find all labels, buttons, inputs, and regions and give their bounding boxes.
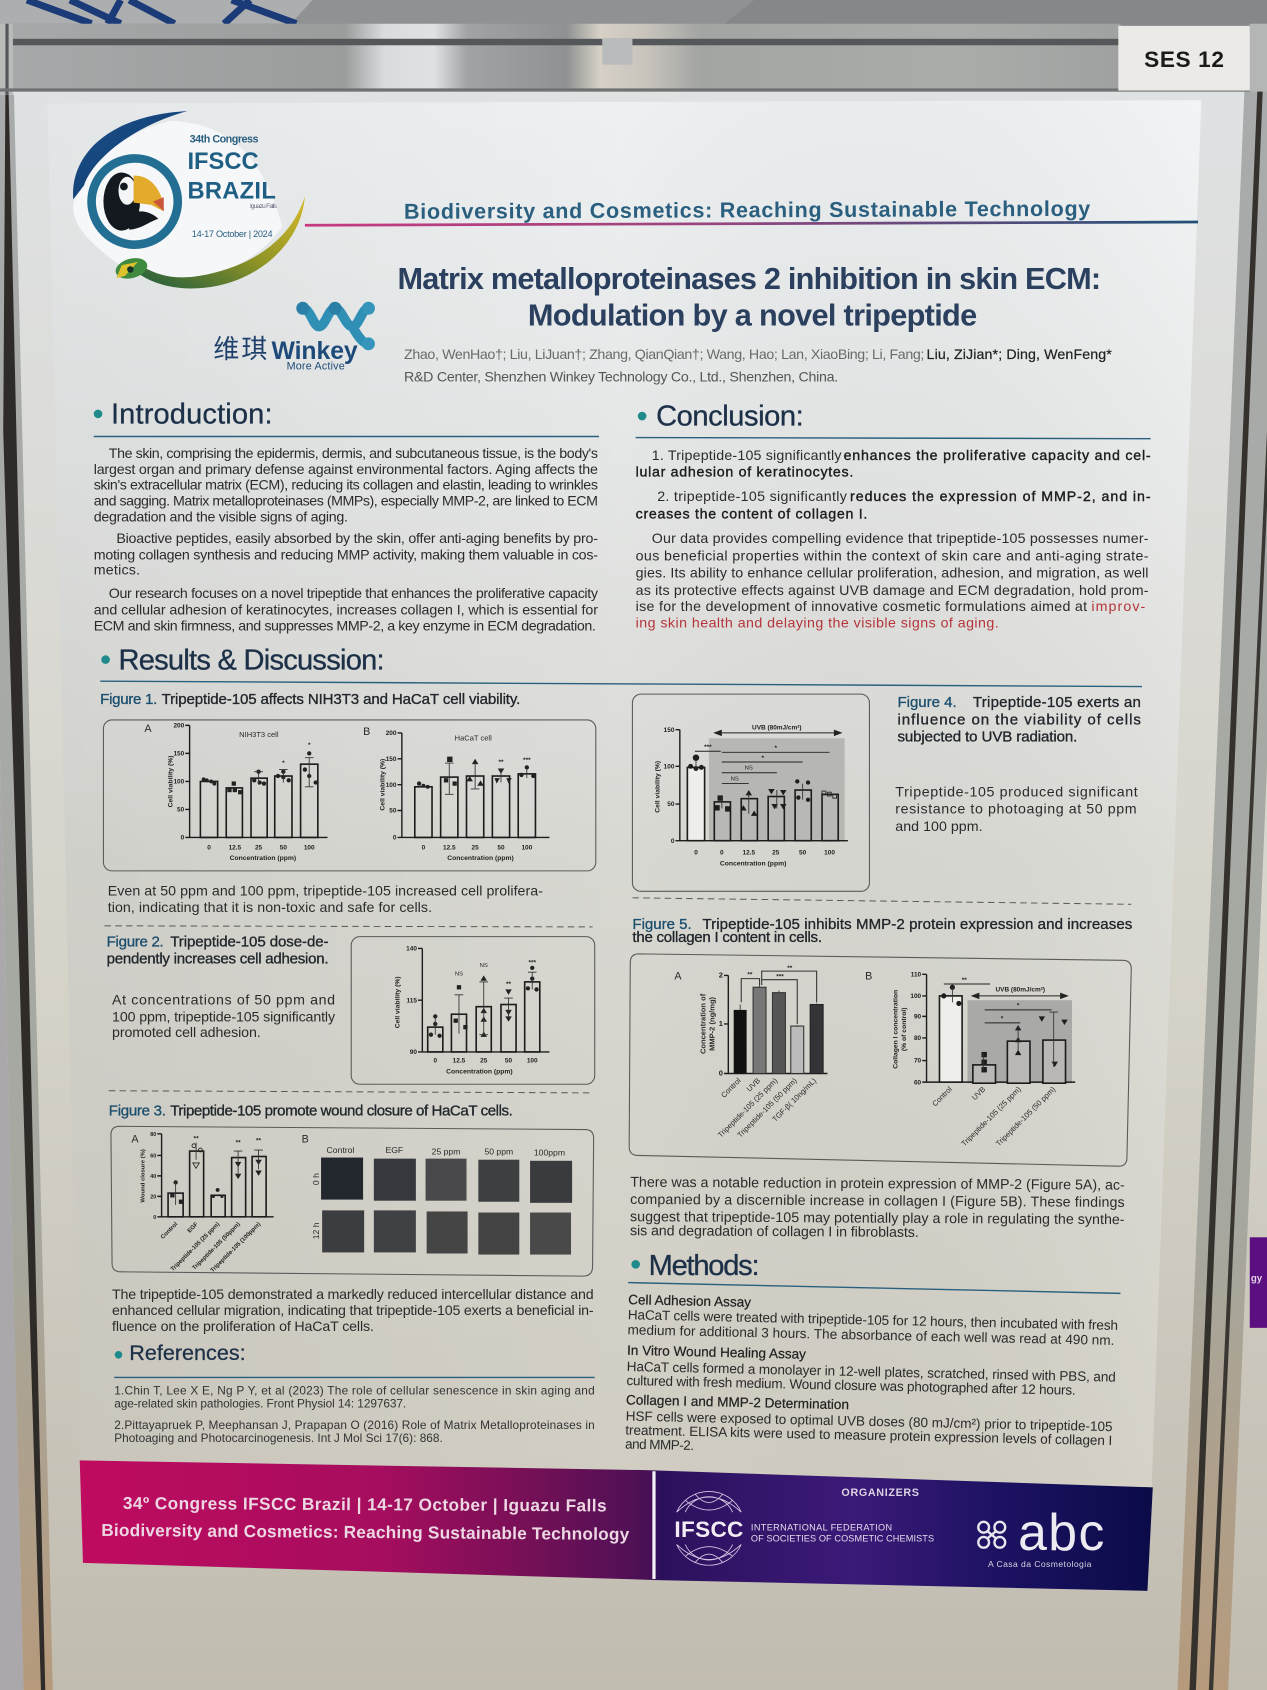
chart: cell adhesion: 100 [527,1058,538,1065]
chart: 1A NIH3T3 cell viability: 150 [173,751,185,758]
figure 5 caption: companied by a discernible increase in collagen I (Figure 5B). These findings [630,1192,1125,1211]
chart: 1A NIH3T3 cell viability: Cell viability (%) [167,755,174,807]
panel: figure 2: 100 ppm, tripeptide-105 significantly [112,1010,336,1026]
methods text: Cell Adhesion Assay [628,1292,751,1310]
figure 1 caption [108,884,543,916]
chart: UVB viability: Concentration (ppm) [720,860,786,867]
chart: cell adhesion: ** [506,981,512,988]
chart: wound closure: ** [236,1140,241,1147]
header: conference logo: 34th Congress [190,133,259,145]
logo: IFSCC: OF SOCIETIES OF COSMETIC CHEMISTS [751,1533,934,1543]
chart: 1A NIH3T3 cell viability: A [144,723,152,735]
chart: cell adhesion: *** [528,960,536,967]
introduction text [94,446,599,635]
chart: 1B HaCaT cell viability: 100 [521,844,533,851]
authors and affiliation: R&D Center, Shenzhen Winkey Technology Co., Ltd., Shenzhen, China. [404,370,838,386]
chart: wound closure: Wound closure (%) [140,1149,146,1203]
chart: UVB viability: 0 [720,850,724,857]
chart: wound closure: A [131,1133,139,1145]
chart: 1B HaCaT cell viability: ** [498,759,504,766]
chart: wound closure: EGF [187,1221,200,1234]
chart: 1A NIH3T3 cell viability: * [308,742,311,749]
chart: MMP-2 concentration: Control [719,1076,743,1100]
chart: 1A NIH3T3 cell viability: 25 [255,844,263,851]
right post [1178,92,1267,1690]
chart: 1B HaCaT cell viability: Concentration (ppm) [447,855,514,862]
chart: UVB viability: UVB (80mJ/cm²) [752,725,802,732]
chart: wound closure: 20 [150,1195,156,1201]
chart: wound closure: Tripeptide-105 (100ppm) [210,1222,262,1274]
chart: 1A NIH3T3 cell viability: NIH3T3 cell [239,730,279,739]
chart: wound closure: 60 [150,1154,156,1160]
chart: wound closure: ** [256,1137,262,1144]
panel: figure 5 [629,916,1132,1242]
chart: UVB viability: 50 [799,850,807,857]
chart: collagen I concentration [865,971,1075,1148]
chart: UVB viability: Cell viability (%) [654,761,661,813]
chart: UVB viability: 12.5 [742,850,755,857]
methods text: HaCaT cells formed a monolayer in 12-well plates, scratched, rinsed with PBS, and [627,1359,1116,1385]
chart: 1B HaCaT cell viability: 50 [389,808,397,815]
panel: figure 2: Figure 2. [107,933,164,950]
conclusion text: Our data provides compelling evidence that tripeptide-105 possesses numer- [652,531,1149,547]
conclusion text: 1. Tripeptide-105 significantly [652,448,842,464]
logo: IFSCC: INTERNATIONAL FEDERATION [751,1522,892,1532]
chart: collagen I concentration: Tripeptide-105 (50 ppm) [994,1084,1058,1148]
chart: 1A NIH3T3 cell viability: 0 [207,844,211,851]
introduction text: and sagging. Matrix metalloproteinases (MMPs), especially MMP-2, are linked to ECM [94,493,598,509]
conclusion text: gies. Its ability to enhance cellular proliferation, adhesion, and migration, as well [636,566,1148,582]
chart: 1A NIH3T3 cell viability: 200 [173,723,185,730]
chart: MMP-2 concentration: TGF-β( 10ng/mL) [770,1076,818,1124]
header: conference logo [73,111,305,288]
panel: conclusion: Conclusion: [656,401,804,433]
chart: cell adhesion: 50 [505,1058,513,1065]
micrographs: B [302,1133,309,1145]
title: Modulation by a novel tripeptide [528,297,977,332]
title [398,261,1101,332]
chart: 1A NIH3T3 cell viability [144,723,328,862]
chart: 1A NIH3T3 cell viability: 50 [177,807,185,814]
chart: cell adhesion: Cell viability (%) [395,976,402,1028]
methods text: HaCaT cells were treated with tripeptide-105 for 12 hours, then incubated with fresh [628,1307,1118,1333]
micrographs: 12 h [311,1222,321,1239]
heading: results and discussion: Results & Discussion: [119,644,385,676]
figure 4 title [897,694,1141,746]
chart: 1A NIH3T3 cell viability: * [282,760,285,767]
neighbouring poster strip [1250,1237,1267,1328]
panel: figure 3: Tripeptide-105 promote wound closure of HaCaT cells. [170,1103,513,1120]
introduction text: Our research focuses on a novel tripeptide that enhances the proliferative capacity [109,586,599,602]
panel: figure 1: Tripeptide-105 affects NIH3T3 and HaCaT cell viability. [162,691,520,708]
chart: wound closure: 0 [153,1215,156,1221]
logo: Winkey: 维琪 [213,335,267,364]
panel: figure 5: Figure 5. [632,916,692,933]
micrographs: 50 ppm [484,1146,513,1156]
chart: UVB viability: * [762,755,765,762]
chart: 1B HaCaT cell viability: 200 [386,730,397,737]
methods text: HSF cells were exposed to optimal UVB doses (80 mJ/cm²) prior to tripeptide-105 [626,1409,1113,1434]
chart: collagen I concentration: 90 [914,1014,922,1021]
panel: references: 1.Chin T, Lee X E, Ng P Y, et al (2023) The role of cellular senescence in skin aging and [114,1384,595,1398]
conclusion text: as its protective effects against UVB damage and ECM degradation, hold prom- [636,583,1149,599]
introduction text: metics. [94,562,140,578]
figure 4 title: Tripeptide-105 exerts an [973,694,1141,711]
figure 4 caption: Tripeptide-105 produced significant [895,784,1138,800]
introduction text: ECM and skin firmness, and suppresses MMP-2, a key enzyme in ECM degradation. [94,619,596,635]
panel: introduction: Introduction: [111,399,273,431]
metal top bar [0,24,1250,92]
label: session number SES 12 [1118,26,1250,91]
panel: references: References: [129,1340,246,1365]
chart: UVB viability: 100 [664,763,675,770]
chart: collagen I concentration: Control [930,1084,954,1108]
chart: collagen I concentration: 80 [914,1035,922,1042]
chart: UVB viability: 50 [667,801,675,808]
authors and affiliation: Zhao, WenHao†; Liu, LiJuan†; Zhang, QianQian†; Wang, Hao; Lan, XiaoBing; Li, Fang; [404,347,924,363]
chart: MMP-2 concentration: 1 [719,1019,723,1028]
chart: 1B HaCaT cell viability: B [363,726,370,738]
panel: figure 3 [109,1103,594,1335]
chart: cell adhesion: 140 [406,946,417,953]
chart: MMP-2 concentration [674,965,827,1139]
introduction text: moting collagen synthesis and reducing MMP activity, making them valuable in cos- [94,547,598,563]
micrographs: 100ppm [534,1147,565,1157]
figure 3 caption [112,1287,594,1335]
chart: cell adhesion: 12.5 [453,1058,466,1065]
panel: references [114,1340,595,1445]
figure 5 caption: sis and degradation of collagen I in fibroblasts. [630,1223,919,1241]
panel: figure 2: promoted cell adhesion. [112,1025,261,1041]
label: session number SES 12: SES 12 [1144,47,1224,72]
panel: figure 5: the collagen I content in cells. [632,929,822,946]
logo: IFSCC [674,1491,934,1565]
panel: figure 2 [107,933,595,1084]
chart: collagen I concentration: (% of control) [901,1008,908,1051]
chart: 1A NIH3T3 cell viability: 100 [173,779,185,786]
micrographs [302,1133,572,1255]
logo: Winkey: Winkey [272,338,358,365]
frame corners beside metal bar [0,24,1267,95]
conclusion text: reduces the expression of MMP-2, and in- [850,489,1151,505]
chart: collagen I concentration: 100 [910,993,922,1000]
panel: figure 2: Tripeptide-105 dose-de- [170,933,329,950]
chart: 1B HaCaT cell viability [363,726,549,862]
panel: methods [625,1250,1120,1462]
chart: cell adhesion: 0 [433,1058,437,1065]
figure 3 caption: The tripeptide-105 demonstrated a markedly reduced intercellular distance and [112,1287,594,1303]
logo toucan ring [92,158,178,245]
figure 3 caption: enhanced cellular migration, indicating that tripeptide-105 exerts a beneficial in- [112,1303,594,1319]
chart: UVB viability: 150 [664,727,675,734]
panel: figure 2: At concentrations of 50 ppm and [112,993,335,1009]
conclusion text: enhances the proliferative capacity and cel- [844,448,1151,464]
figure 1 caption: Even at 50 ppm and 100 ppm, tripeptide-105 increased cell prolifera- [108,884,543,900]
methods text: Collagen I and MMP-2 Determination [626,1392,849,1412]
panel: figure 1: Figure 1. [100,691,157,708]
chart: UVB viability: * [774,745,777,752]
chart: cell adhesion: 115 [407,997,417,1004]
chart: cell adhesion: 90 [410,1049,417,1056]
chart: MMP-2 concentration: *** [776,974,784,981]
chart: MMP-2 concentration: UVB [745,1076,762,1093]
chart: collagen I concentration: 110 [911,971,922,978]
chart: cell adhesion: 25 [480,1058,488,1065]
introduction text: and cellular adhesion of keratinocytes, increases collagen I, which is essential for [94,602,598,618]
logo: abc: abc [1018,1503,1104,1561]
conclusion text: lular adhesion of keratinocytes. [636,464,853,480]
figure 1 caption: tion, indicating that it is non-toxic and safe for cells. [108,900,432,916]
chart: UVB viability: *** [704,744,712,751]
banner congress text: Biodiversity and Cosmetics: Reaching Sustainable Technology [101,1520,630,1544]
chart: wound closure: Control [160,1221,179,1241]
chart: 1A NIH3T3 cell viability: 50 [280,844,287,851]
chart: collagen I concentration: Collagen I concentration [892,990,899,1069]
micrographs: EGF [385,1145,403,1155]
chart: MMP-2 concentration: Tripeptide-105 (25 ppm) [716,1076,780,1139]
conclusion text: creases the content of collagen I. [636,506,867,522]
chart: 1B HaCaT cell viability: Cell viability (%) [380,759,387,811]
header: conference logo: Iguazu Falls [250,203,277,210]
panel: references: 2.Pittayapruek P, Meephansan J, Prapapan O (2016) Role of Matrix Metalloproteinases in [114,1418,595,1432]
background: ceiling [0,0,1267,32]
logo bird [113,255,150,282]
methods text: medium for additional 3 hours. The absorbance of each well was read at 490 nm. [627,1322,1115,1348]
chart: wound closure: 40 [150,1174,156,1180]
chart: cell adhesion [395,946,549,1075]
conclusion text: improv- [1091,599,1146,615]
chart: collagen I concentration: * [1017,1003,1020,1010]
chart: wound closure: Tripeptide-105 (25 ppm) [170,1222,221,1273]
conclusion text [636,448,1151,631]
chart: 1A NIH3T3 cell viability: 0 [181,835,185,842]
logo: IFSCC: IFSCC [674,1517,743,1542]
chart: collagen I concentration: B [865,971,872,983]
chart: MMP-2 concentration: Concentration of [699,993,708,1054]
panel: figure 1 [100,691,596,916]
figure 5 caption [630,1175,1125,1242]
chart: wound closure: ** [194,1135,199,1142]
figure 3 caption: fluence on the proliferation of HaCaT cells. [112,1319,374,1335]
chart: 1A NIH3T3 cell viability: Concentration (ppm) [230,855,296,862]
chart: collagen I concentration: ** [962,977,967,984]
figure 5 caption: suggest that tripeptide-105 may potentially play a role in regulating the synthe- [630,1209,1125,1228]
chart: collagen I concentration: * [1001,1016,1004,1023]
chart: UVB viability: 0 [671,838,675,845]
chart: UVB viability [654,725,848,867]
chart: 1B HaCaT cell viability: HaCaT cell [455,733,492,742]
chart: 1A NIH3T3 cell viability: 12.5 [229,844,242,851]
panel: conclusion [636,401,1151,631]
poster paper [47,100,1201,1487]
panel: figure 2: pendently increases cell adhesion. [107,951,329,968]
banner congress text: 34º Congress IFSCC Brazil | 14-17 October | Iguazu Falls [123,1493,607,1515]
chart: 1B HaCaT cell viability: 12.5 [443,844,456,851]
chart: MMP-2 concentration: ** [747,971,753,978]
chart: wound closure: 80 [150,1132,156,1138]
chart: MMP-2 concentration: 2 [719,971,723,980]
chart: collagen I concentration: 70 [914,1058,922,1065]
introduction text: skin's extracellular matrix (ECM), reducing its collagen and elastin, leading to wrinkles [94,477,598,493]
figure 4 title: subjected to UVB radiation. [897,729,1077,746]
chart: 1B HaCaT cell viability: 0 [393,835,397,842]
figure 5 caption: There was a notable reduction in protein expression of MMP-2 (Figure 5A), ac- [630,1175,1125,1194]
chart: 1B HaCaT cell viability: 25 [472,844,479,851]
organizers label: ORGANIZERS [841,1487,919,1499]
chart: wound closure: Tripeptide-105 (50ppm) [192,1222,242,1272]
methods text: cultured with fresh medium. Wound closure was photographed after 12 hours. [626,1373,1076,1398]
figure 4 title: Figure 4. [897,694,957,711]
chart: 1B HaCaT cell viability: *** [523,757,531,764]
chart: 1B HaCaT cell viability: 50 [497,844,505,851]
conclusion text: ous beneficial properties within the context of skin care and anti-aging strate- [636,548,1149,564]
left post [0,95,53,1690]
methods text [625,1292,1118,1462]
chart: MMP-2 concentration: ** [787,965,793,972]
panel: introduction [94,399,599,635]
chart: collagen I concentration: 60 [914,1079,922,1086]
chart: MMP-2 concentration: MMP-2 (ng/mg) [707,996,716,1051]
chart: UVB viability: NS [731,776,739,782]
logo: abc [978,1503,1104,1569]
chart: MMP-2 concentration: 0 [719,1069,723,1078]
logo: Winkey: More Active [287,361,345,373]
chart: 1B HaCaT cell viability: 100 [386,782,397,789]
banner congress text [101,1493,630,1544]
heading: results and discussion [100,644,1142,687]
figure 4 caption: resistance to photoaging at 50 ppm [895,802,1137,818]
panel: references: Photoaging and Photocarcinogenesis. Int J Mol Sci 17(6): 868. [114,1431,443,1445]
authors and affiliation: Liu, ZiJian*; Ding, WenFeng* [927,347,1112,363]
methods text: and MMP-2. [625,1437,694,1453]
outer wall left [0,754,24,1690]
authors and affiliation [404,347,1112,386]
chart: collagen I concentration: UVB (80mJ/cm²) [996,987,1045,994]
conclusion text: 2. tripeptide-105 significantly [657,489,848,505]
chart: MMP-2 concentration: A [674,971,682,983]
chart: collagen I concentration: UVB [970,1085,987,1102]
logo: Winkey [213,302,375,373]
panel: references: age-related skin pathologies. Front Physiol 14: 1297637. [114,1397,406,1411]
micrographs: 25 ppm [432,1146,460,1156]
micrographs: 0 h [311,1173,321,1185]
neighbouring poster strip: gy [1251,1274,1263,1285]
introduction text: Bioactive peptides, easily absorbed by the skin, offer anti-aging benefits by pro- [116,531,598,547]
chart: 1B HaCaT cell viability: 0 [422,844,426,851]
header: conference logo: BRAZIL [187,178,276,204]
panel: figure 5: Tripeptide-105 inhibits MMP-2 protein expression and increases [702,916,1132,933]
chart: collagen I concentration: Tripeptide-105 (25 ppm) [959,1084,1023,1148]
chart: UVB viability: NS [745,766,753,772]
chart: wound closure [131,1132,274,1274]
conclusion text: ing skin health and delaying the visible signs of aging. [636,615,999,631]
chart: 1B HaCaT cell viability: 150 [386,756,397,763]
figure 4 caption [895,784,1138,835]
micrographs: Control [327,1145,354,1155]
introduction text: The skin, comprising the epidermis, dermis, and subcutaneous tissue, is the body's [109,446,598,462]
chart: UVB viability: 0 [694,850,698,857]
chart: cell adhesion: Concentration (ppm) [446,1068,513,1075]
figure 4 caption: and 100 ppm. [895,819,983,835]
panel: figure 3: Figure 3. [109,1103,166,1120]
footer banner [80,1460,1153,1591]
methods text: In Vitro Wound Healing Assay [627,1343,806,1362]
panel: methods: Methods: [649,1250,760,1282]
chart: 1A NIH3T3 cell viability: 100 [304,844,315,851]
panel: figure 4 [632,694,1141,891]
conclusion text: ise for the development of innovative cosmetic formulations aimed at [636,599,1087,615]
logo: abc: A Casa da Cosmetologia [988,1559,1092,1569]
chart: MMP-2 concentration: Tripeptide-105 (50 ppm) [735,1076,799,1139]
chart: cell adhesion: NS [480,963,488,969]
chart: cell adhesion: NS [455,971,463,977]
header: conference theme line: Biodiversity and Cosmetics: Reaching Sustainable Technology [404,196,1090,224]
chart: UVB viability: 100 [824,850,835,857]
figure 4 title: influence on the viability of cells [897,711,1141,728]
header: conference logo: 14-17 October | 2024 [192,229,273,239]
title: Matrix metalloproteinases 2 inhibition in skin ECM: [398,261,1101,296]
methods text: treatment. ELISA kits were used to measure protein expression levels of collagen I [625,1423,1112,1448]
introduction text: largest organ and primary defense against environmental factors. Aging affects the [94,462,598,478]
header: conference logo: IFSCC [187,149,259,175]
chart: UVB viability: 25 [772,850,780,857]
introduction text: degradation and the visible signs of aging. [94,510,348,526]
